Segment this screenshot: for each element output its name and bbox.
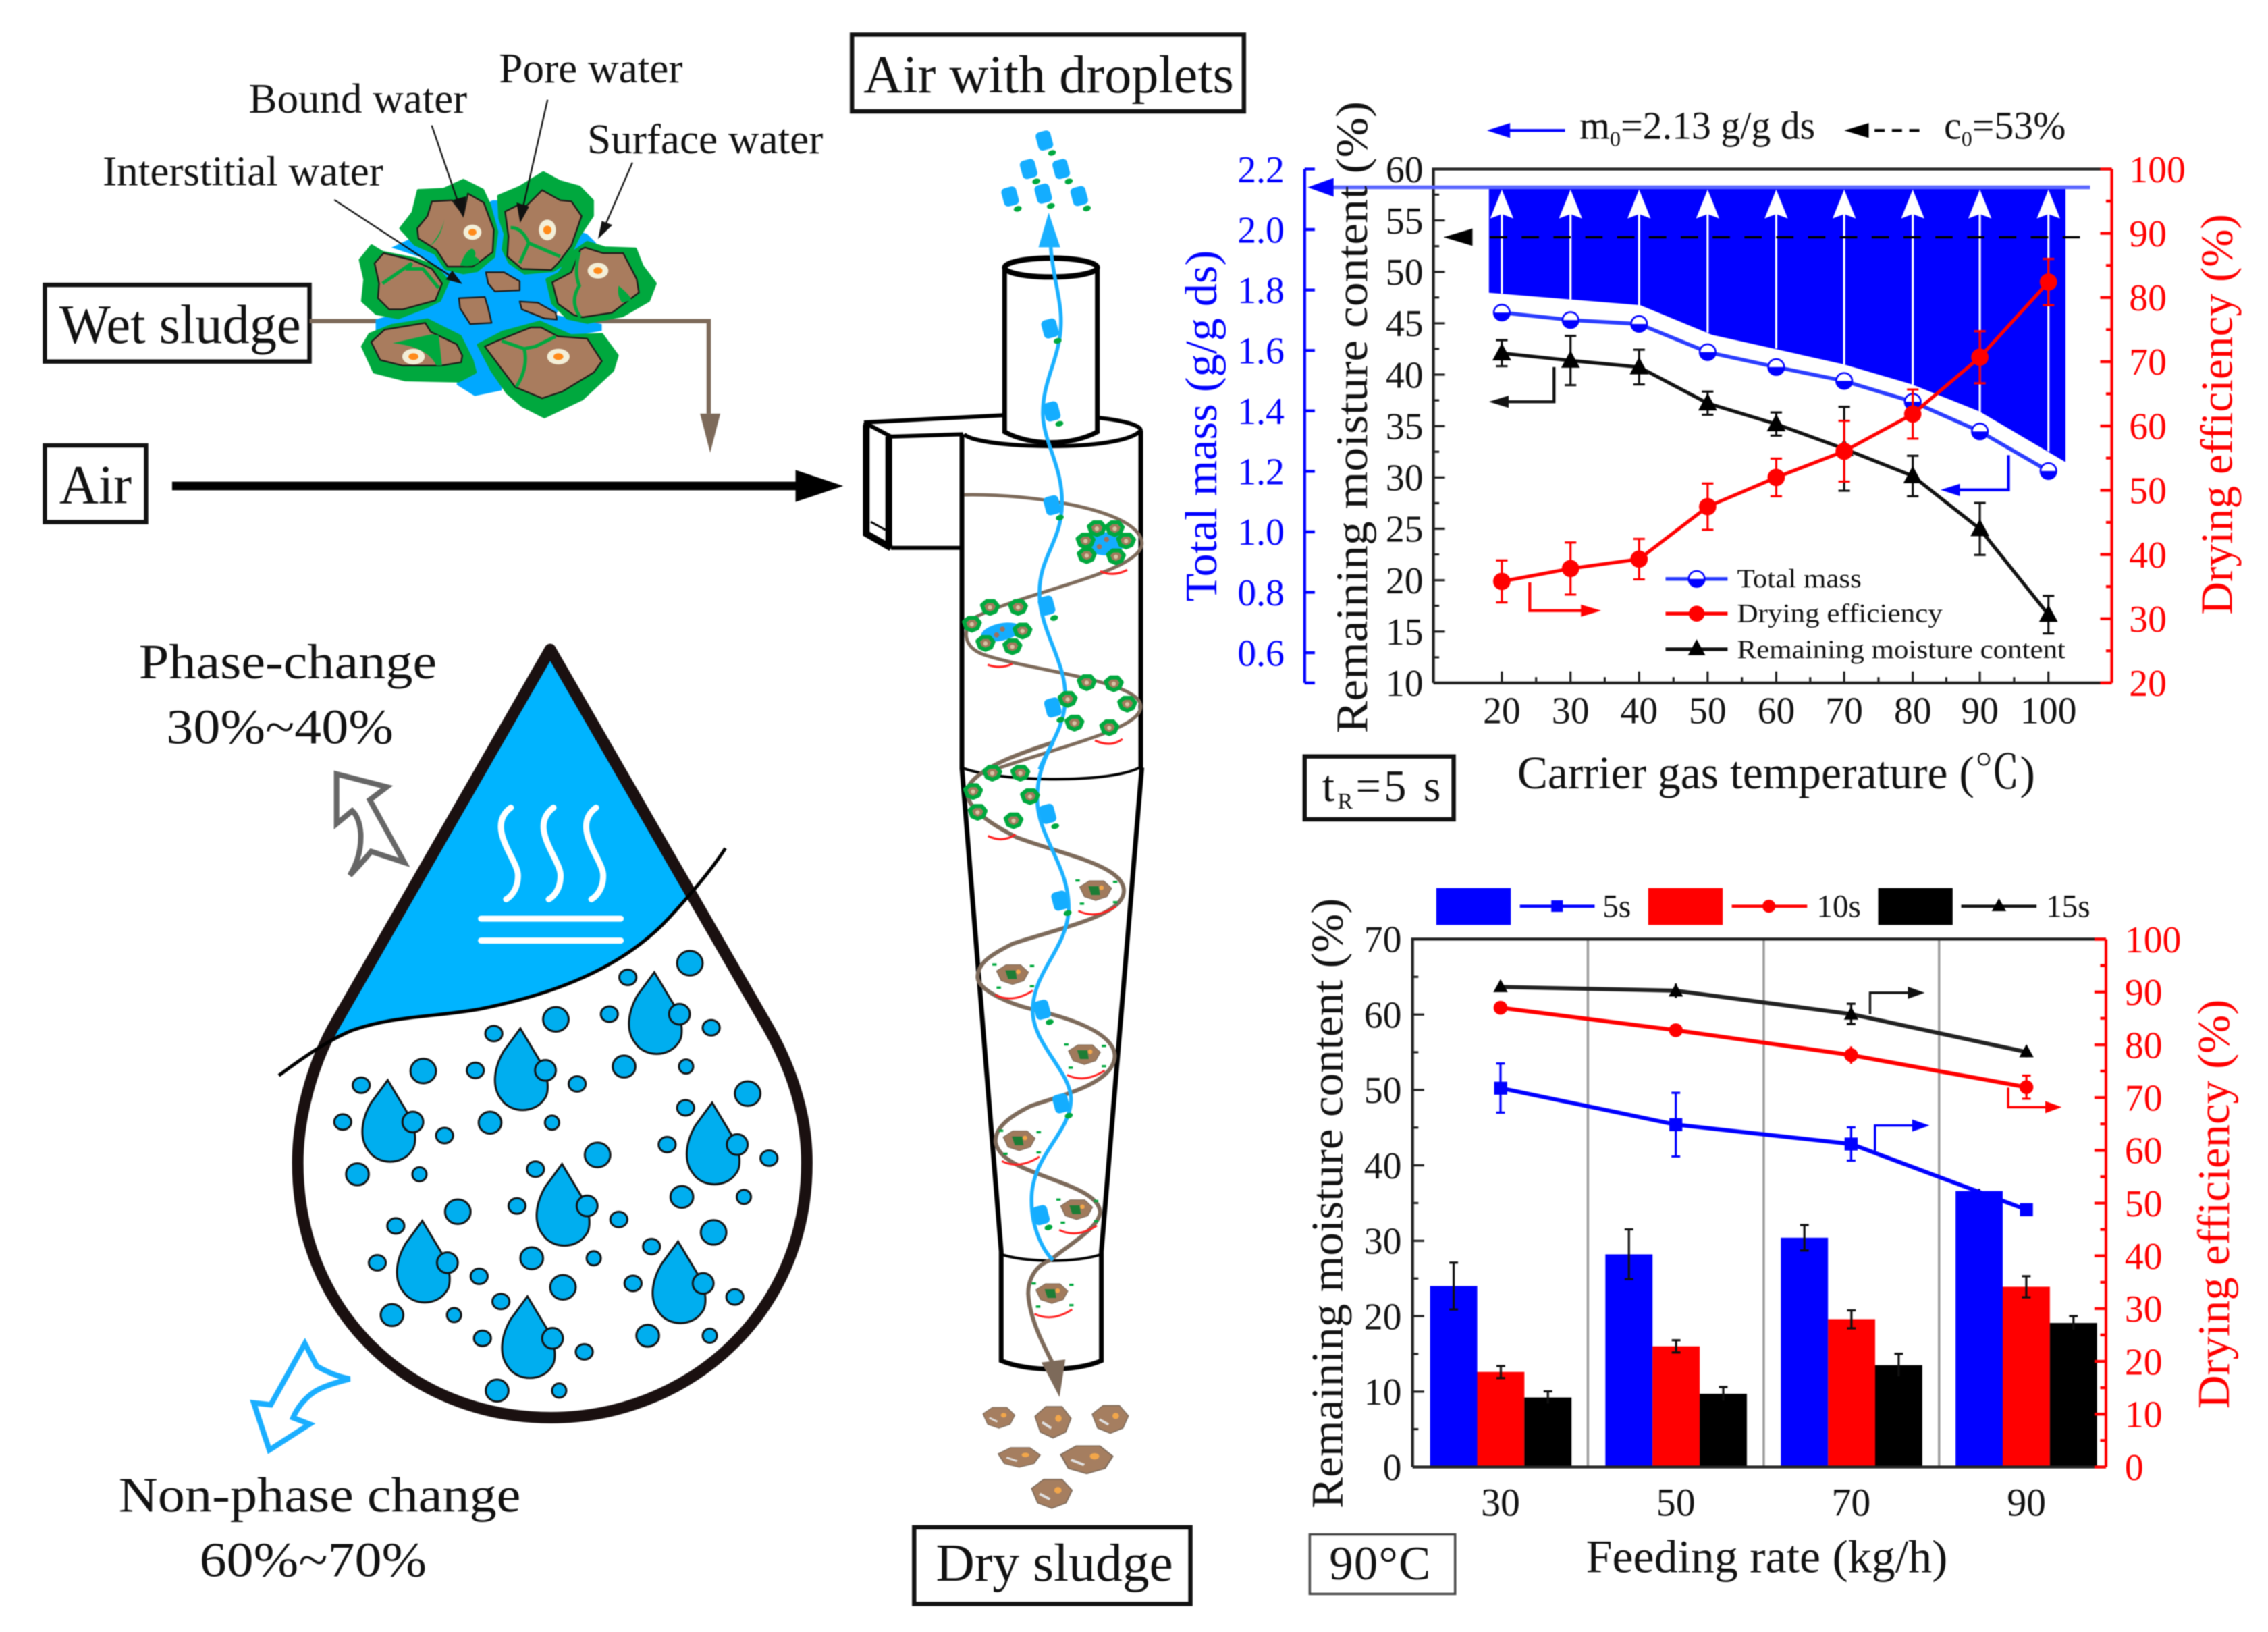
chart legend	[1666, 564, 2066, 664]
left labels: 50	[1364, 1070, 1401, 1112]
top legend: =2.13 g/g ds	[1621, 104, 1815, 148]
red axis: 70	[2129, 342, 2167, 383]
x axis labels	[1483, 690, 2076, 732]
bars: 10s	[1477, 1286, 2050, 1467]
tR box	[1305, 757, 1454, 819]
x labels	[1481, 1481, 2046, 1525]
top legend: =53%	[1972, 104, 2066, 148]
red axis	[2095, 919, 2181, 1489]
red axis	[2100, 149, 2186, 705]
temperature box	[1310, 1535, 1455, 1594]
x labels: 70	[1832, 1481, 1870, 1525]
series: total mass	[1494, 304, 2056, 479]
legend: 5s	[1602, 890, 1631, 925]
series: 10s	[1494, 1001, 2033, 1099]
axis pointer: red	[2008, 1087, 2061, 1113]
x axis labels: 40	[1620, 690, 1658, 732]
panel: air inlet	[45, 445, 843, 522]
blue axis: 2.0	[1237, 209, 1285, 251]
blue axis: 1.6	[1237, 330, 1285, 372]
group separators	[1588, 939, 1939, 1467]
boundary curve	[279, 848, 726, 1076]
left labels: 60	[1364, 995, 1401, 1037]
steam icon	[481, 808, 621, 941]
axis title: drying efficiency: Drying efficiency (%)	[2190, 1000, 2239, 1409]
arrow: phase change out	[337, 774, 404, 875]
left labels: 70	[1364, 919, 1401, 961]
series: 15s	[1493, 979, 2034, 1057]
blue axis: 0.6	[1237, 632, 1285, 674]
droplet fill: phase-change region	[329, 653, 693, 1041]
axis pointer: black	[1870, 987, 1924, 1014]
red axis: 100	[2125, 919, 2181, 961]
droplet outline	[298, 649, 807, 1417]
tR box: R	[1337, 788, 1355, 814]
red axis: 20	[2125, 1341, 2163, 1383]
axis title: feeding rate: Feeding rate (kg/h)	[1586, 1531, 1947, 1582]
arrow: non-phase change out	[254, 1343, 350, 1450]
label: non-phase change: Non-phase change	[119, 1467, 520, 1522]
axis title: remaining moisture: Remaining moisture content (%)	[1328, 101, 1377, 733]
label: pore water: Pore water	[499, 46, 683, 92]
axes frame	[1434, 169, 2112, 683]
sludge exit arrowhead	[1042, 1359, 1065, 1397]
legend	[1436, 888, 2090, 925]
left labels: 20	[1364, 1296, 1401, 1338]
sludge floc 3	[1060, 676, 1135, 744]
sludge floc illustration	[334, 100, 655, 416]
left labels: 30	[1364, 1221, 1401, 1263]
series: 5s	[1494, 1064, 2033, 1216]
cyclone cone and lower pipe	[962, 767, 1142, 1369]
pore water veins	[383, 219, 631, 387]
top legend: m	[1580, 104, 1610, 148]
droplet illustration	[254, 649, 807, 1450]
tR box: =5 s	[1355, 762, 1444, 811]
legend: 15s	[2046, 890, 2090, 925]
top legend: c	[1944, 104, 1962, 148]
left labels: 10	[1364, 1371, 1401, 1413]
label: bound water: Bound water	[249, 76, 467, 122]
blue axis: 1.4	[1237, 391, 1285, 433]
sludge floc 2	[964, 601, 1031, 667]
red axis: 80	[2125, 1025, 2163, 1066]
axis title: moisture: Remaining moisture content (%)	[1303, 898, 1353, 1508]
left axis labels: 20	[1386, 560, 1424, 602]
bar error bars	[1449, 1189, 2078, 1403]
red axis: 90	[2125, 972, 2163, 1014]
red axis: 50	[2125, 1183, 2163, 1225]
x labels: 30	[1481, 1481, 1520, 1525]
surface water envelopes	[360, 173, 655, 416]
red axis: 0	[2125, 1447, 2144, 1489]
left axis ticks	[1434, 169, 2049, 683]
axis pointer: red	[1530, 582, 1601, 617]
initial mass line	[1307, 178, 2090, 196]
red axis: 10	[2125, 1394, 2163, 1436]
left axis labels: 10	[1386, 663, 1424, 705]
x axis labels: 80	[1894, 690, 1932, 732]
x axis labels: 50	[1689, 690, 1727, 732]
blue axis: 1.2	[1237, 452, 1285, 493]
bars: 5s	[1430, 1191, 2003, 1467]
top legend: 0	[1610, 126, 1621, 151]
axes frame	[1413, 939, 2106, 1467]
axis title: temperature: Carrier gas temperature (℃)	[1517, 747, 2035, 798]
label: air box: Air	[59, 454, 132, 516]
sludge spiral upper	[964, 495, 1142, 769]
air arrow	[172, 470, 843, 502]
tR box: t	[1322, 762, 1337, 811]
droplets	[1000, 130, 1091, 1231]
sludge feed line	[310, 321, 709, 414]
label: air with droplets box: Air with droplets	[863, 45, 1234, 105]
blue axis	[1237, 149, 1315, 683]
air stream arrowhead	[1039, 213, 1060, 247]
red axis: 80	[2129, 277, 2167, 319]
label: phase change: Phase-change	[139, 634, 437, 689]
bars: 15s	[1524, 1323, 2097, 1467]
blue axis: 1.8	[1237, 270, 1285, 312]
temperature box: 90°C	[1329, 1538, 1430, 1590]
interstitial water	[376, 200, 602, 396]
left axis labels: 40	[1386, 354, 1424, 396]
left axis labels: 30	[1386, 458, 1424, 499]
dry sludge particles	[983, 1405, 1129, 1508]
water droplets	[334, 951, 778, 1402]
x labels: 90	[2007, 1481, 2046, 1525]
blue axis: 2.2	[1237, 149, 1285, 191]
red axis: 30	[2125, 1288, 2163, 1330]
label: phase change: 30%~40%	[166, 699, 394, 754]
top legend: 0	[1962, 126, 1972, 151]
red axis: 90	[2129, 213, 2167, 255]
left axis labels: 25	[1386, 509, 1424, 551]
label: air box	[45, 445, 146, 522]
axis pointer: black	[1489, 367, 1554, 408]
drying sludge particles	[992, 881, 1117, 1317]
red axis: 60	[2125, 1131, 2163, 1172]
sludge floc 1	[1077, 522, 1134, 574]
axis pointer: blue	[1875, 1120, 1930, 1151]
left axis labels: 55	[1386, 200, 1424, 242]
red axis: 70	[2125, 1077, 2163, 1119]
axis title: drying efficiency: Drying efficiency (%)	[2192, 214, 2242, 615]
label: non-phase change	[119, 1467, 520, 1587]
label: surface water: Surface water	[587, 117, 824, 163]
red axis: 20	[2129, 663, 2167, 705]
chart legend: Total mass	[1737, 564, 1862, 593]
x axis labels: 90	[1961, 690, 1999, 732]
air stream lower	[1031, 742, 1071, 1260]
cyclone upper body	[864, 258, 1141, 769]
pointer lines	[334, 100, 632, 284]
left labels: 0	[1383, 1447, 1401, 1489]
left axis labels: 50	[1386, 252, 1424, 294]
panel: feeding rate chart	[1303, 888, 2239, 1594]
white upward arrows	[1490, 190, 2060, 452]
left axis labels	[1386, 149, 1424, 705]
x axis labels: 20	[1483, 690, 1521, 732]
left labels	[1364, 919, 1401, 1489]
legend: 10s	[1816, 890, 1861, 925]
label: dry sludge box: Dry sludge	[936, 1533, 1173, 1593]
x labels: 50	[1656, 1481, 1696, 1525]
series: drying efficiency	[1493, 259, 2057, 602]
panel: temperature chart	[1177, 101, 2242, 819]
left labels: 40	[1364, 1145, 1401, 1187]
panel: phase change droplet	[119, 634, 807, 1587]
total water removed area	[1489, 188, 2066, 462]
bound water dots	[402, 219, 608, 364]
left axis labels: 60	[1386, 149, 1424, 191]
sludge feed arrowhead	[700, 414, 720, 453]
initial moisture line	[1444, 229, 2090, 246]
chart legend: Remaining moisture content	[1737, 634, 2066, 664]
blue axis: 0.8	[1237, 572, 1285, 614]
panel: cyclone	[852, 34, 1244, 1604]
x axis labels: 60	[1758, 690, 1795, 732]
label: non-phase change: 60%~70%	[200, 1533, 427, 1587]
left axis labels: 45	[1386, 303, 1424, 345]
series: remaining moisture	[1492, 336, 2058, 634]
x axis labels: 70	[1825, 690, 1863, 732]
label: interstitial water: Interstitial water	[103, 148, 383, 194]
label: phase change	[139, 634, 437, 754]
left ticks	[1413, 939, 1424, 1430]
sludge floc 4	[965, 767, 1038, 839]
red axis: 100	[2129, 149, 2186, 191]
red axis: 30	[2129, 599, 2167, 641]
label: wet sludge box: Wet sludge	[59, 294, 301, 355]
sludge particles	[371, 190, 639, 398]
left axis labels: 15	[1386, 611, 1424, 653]
axis title: total mass: Total mass (g/g ds)	[1177, 250, 1226, 601]
top legend	[1487, 104, 2066, 151]
x axis labels: 30	[1552, 690, 1590, 732]
air stream upper	[1040, 247, 1065, 769]
left axis labels: 35	[1386, 406, 1424, 448]
x axis labels: 100	[2020, 690, 2076, 732]
blue axis: 1.0	[1237, 512, 1285, 553]
sludge spiral lower	[967, 742, 1124, 1375]
red axis: 40	[2125, 1236, 2163, 1278]
red axis: 60	[2129, 406, 2167, 447]
red axis: 50	[2129, 470, 2167, 512]
axis pointer: blue	[1941, 455, 2009, 496]
red axis: 40	[2129, 535, 2167, 576]
chart legend: Drying efficiency	[1737, 598, 1943, 628]
panel: wet sludge composition	[45, 46, 824, 453]
label: dry sludge box	[914, 1527, 1191, 1604]
